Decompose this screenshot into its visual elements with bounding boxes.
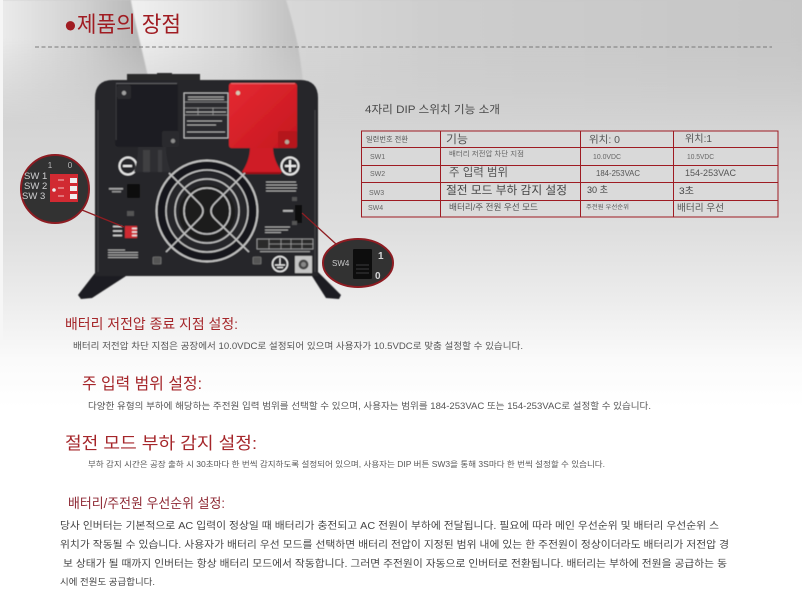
row SW4: 배터리 우선 <box>677 203 724 214</box>
table body fill <box>361 131 778 217</box>
row SW2: SW2 <box>370 171 385 178</box>
row SW2: 주 입력 범위 <box>449 166 508 179</box>
heading: 배터리 저전압 종료 지점 설정: <box>65 316 238 332</box>
row SW2: 154-253VAC <box>685 168 736 178</box>
callout: SW1-3 magnified: 1 <box>48 161 53 170</box>
callout: SW4 magnified <box>323 239 393 287</box>
SW4 switch on chassis <box>283 197 302 225</box>
row SW3: 30 초 <box>587 185 608 196</box>
row SW4: 주전원 우선순위 <box>586 203 629 211</box>
table header row: 위치: 0 <box>589 133 620 146</box>
callout: SW4 magnified: SW4 <box>332 259 350 268</box>
DIP switch function table <box>361 131 778 217</box>
table header row: 일련번호 전환 <box>366 134 409 144</box>
table header row: 기능 <box>446 133 468 146</box>
callout: SW1-3 magnified: 0 <box>68 161 73 170</box>
negative terminal symbol <box>120 158 136 174</box>
mounting feet <box>78 272 341 299</box>
row SW3: SW3 <box>369 190 384 197</box>
callout leader: SW4 <box>302 213 336 244</box>
body text: 다양한 유형의 부하에 해당하는 주전원 입력 범위를 선택할 수 있으며, 사용자는 범위를 184-253VAC 또는 154-253VAC로 설정할 수 있습니다. <box>88 400 651 411</box>
row SW1: SW1 <box>370 154 385 161</box>
row SW4: 배터리/주 전원 우선 모드 <box>449 202 538 212</box>
callout: SW1-3 magnified <box>21 155 89 223</box>
body paragraph <box>60 519 729 587</box>
remote port <box>109 184 140 198</box>
body text: 배터리 저전압 차단 지점은 공장에서 10.0VDC로 설정되어 있으며 사용자가 10.5VDC로 맞춤 설정할 수 있습니다. <box>73 340 523 351</box>
body paragraph: 시에 전원도 공급합니다. <box>60 577 155 587</box>
body paragraph: 보 상태가 될 때까지 인버터는 항상 배터리 모드에서 작동합니다. 그러면 주전원이 자동으로 인버터로 전환됩니다. 배터리는 부하에 전원을 공급하는 동 <box>63 557 727 570</box>
callout: SW1-3 magnified: SW 2 <box>24 181 47 192</box>
row SW1 <box>370 149 714 161</box>
body text: 부하 감지 시간은 공장 출하 시 30초마다 한 번씩 감지하도록 설정되어 있으며, 사용자는 DIP 버튼 SW3을 통해 3S마다 한 번씩 설정할 수 있습니다. <box>88 459 605 469</box>
specification table plate <box>257 239 313 252</box>
title: ●제품의 장점 <box>64 12 181 37</box>
top handle <box>127 73 200 82</box>
inverter product illustration <box>78 73 341 299</box>
heading: 주 입력 범위 설정: <box>82 375 202 393</box>
callout: SW1-3 magnified: SW 3 <box>22 191 45 202</box>
row SW3 <box>369 183 694 197</box>
fan mounting screws <box>153 257 261 264</box>
table header row <box>366 132 712 146</box>
row SW2: 184-253VAC <box>596 169 640 178</box>
positive terminal symbol <box>282 158 298 174</box>
page background <box>0 0 802 346</box>
row SW1: 10.0VDC <box>593 154 621 161</box>
row SW3: 3초 <box>679 186 694 197</box>
row SW4: SW4 <box>368 205 383 212</box>
callout: SW4 magnified: 1 <box>378 251 384 262</box>
table heading: 4자리 DIP 스위치 기능 소개 <box>365 103 500 116</box>
callout: SW1-3 magnified: SW 1 <box>24 171 47 182</box>
DIP switch SW1-3 on chassis <box>113 211 137 238</box>
ground symbol <box>272 256 288 272</box>
heading: 배터리/주전원 우선순위 설정: <box>68 496 225 511</box>
body paragraph: 위치가 작동될 수 있습니다. 사용자가 배터리 우선 모드를 선택하면 배터리 전압이 지정된 범위 내에 있는 한 주전원이 정상이더라도 배터리가 저전압 경 <box>60 538 729 551</box>
callout leader: SW1-3 <box>82 210 124 227</box>
section: battery low-voltage cutoff <box>65 316 523 351</box>
black terminal cover <box>115 83 179 172</box>
body paragraph: 당사 인버터는 기본적으로 AC 입력이 정상일 때 배터리가 충전되고 AC 전원이 부하에 전달됩니다. 필요에 따라 메인 우선순위 및 배터리 우선순위 스 <box>60 519 719 532</box>
section: power-saving load detection <box>65 434 605 469</box>
cooling fan <box>155 159 259 263</box>
table grid lines <box>361 131 778 217</box>
row SW4 <box>368 202 724 214</box>
round connector <box>295 256 312 273</box>
row SW2 <box>370 166 736 179</box>
terminal specification label <box>184 93 228 138</box>
heading: 절전 모드 부하 감지 설정: <box>65 434 257 453</box>
title dashed rule <box>35 46 772 48</box>
section: main input range <box>82 375 651 411</box>
row SW1: 10.5VDC <box>687 154 714 161</box>
row SW3: 절전 모드 부하 감지 설정 <box>446 183 567 197</box>
chassis <box>95 80 318 276</box>
section: battery and mains priority <box>60 496 729 587</box>
row SW1: 배터리 저전압 차단 지점 <box>449 149 524 158</box>
small printed notes <box>108 182 297 258</box>
table header row: 위치:1 <box>685 132 712 145</box>
red terminal cover <box>229 83 297 174</box>
callout: SW4 magnified: 0 <box>375 271 381 282</box>
